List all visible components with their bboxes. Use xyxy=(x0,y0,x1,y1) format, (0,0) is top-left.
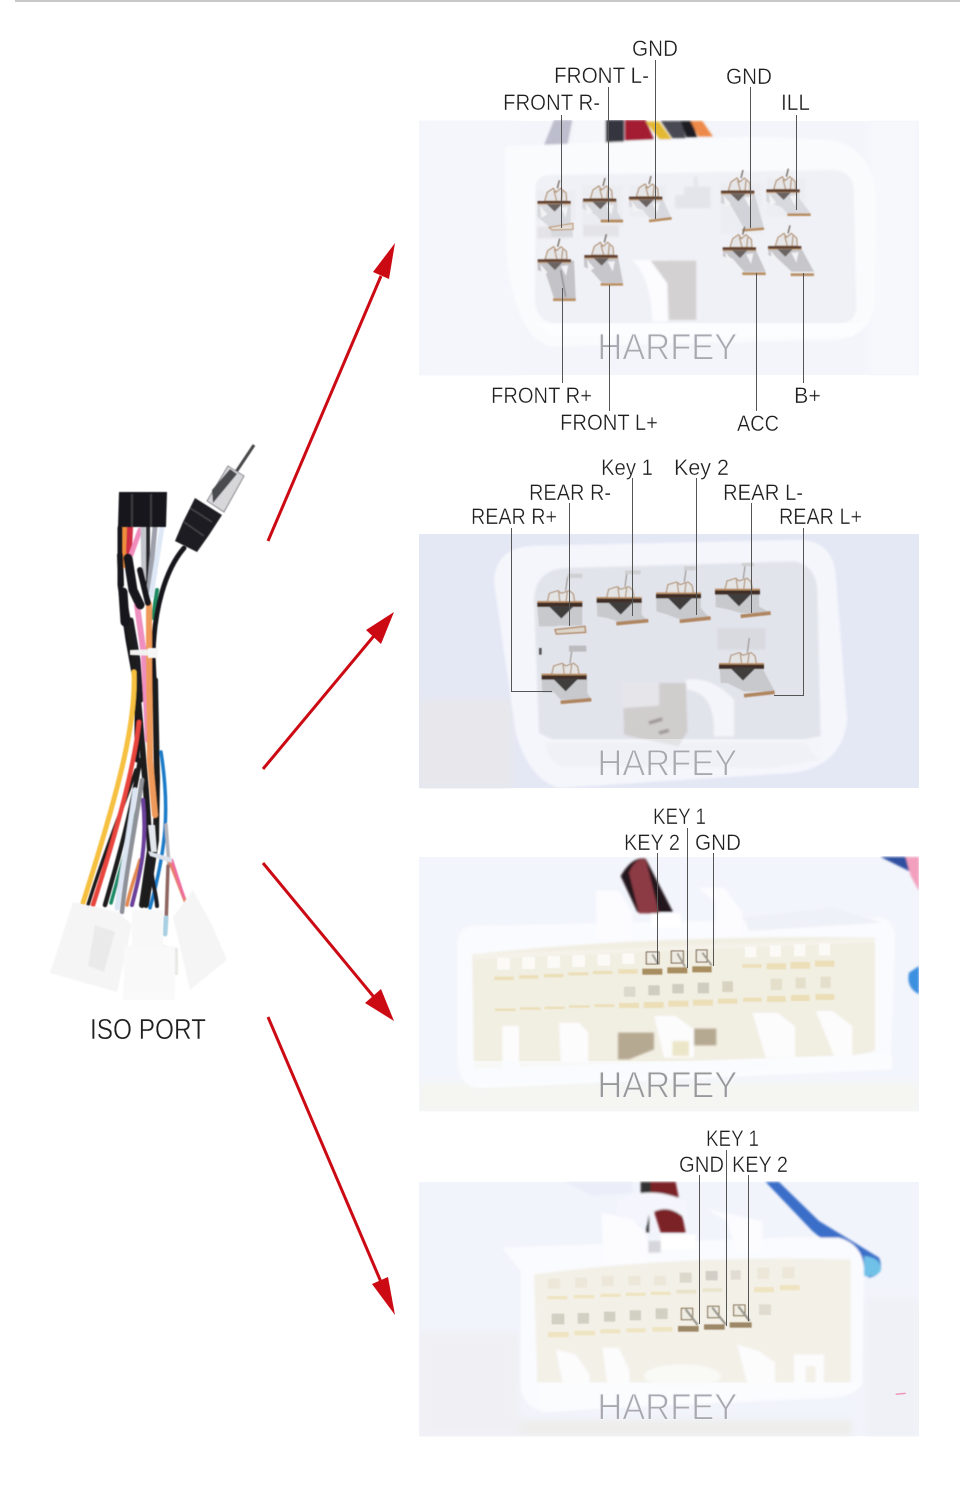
labels: panel 1: FRONT R- xyxy=(503,90,600,115)
upper wires xyxy=(121,527,127,565)
watermark: HARFEY xyxy=(597,1385,737,1427)
white connectors xyxy=(50,902,132,992)
labels: panel 4: KEY 2 xyxy=(732,1152,788,1177)
salmon wire xyxy=(170,862,186,903)
watermark band xyxy=(537,1383,864,1413)
heat-shrink tubes xyxy=(120,555,121,585)
arrow 3 xyxy=(263,863,394,1021)
labels: panel 3: KEY 1 xyxy=(653,804,706,829)
grey tube xyxy=(166,825,169,866)
contact pins xyxy=(537,202,573,237)
keying tabs xyxy=(618,1033,654,1059)
panel: connector photo 2 xyxy=(419,534,919,788)
green xyxy=(111,810,137,903)
labels: panel 2: Key 2 xyxy=(674,455,729,480)
top rule xyxy=(15,0,960,2)
black bundle xyxy=(120,528,137,760)
black right xyxy=(151,850,157,906)
labels: panel 3: GND xyxy=(695,830,741,855)
blue xyxy=(150,752,166,908)
cable ties xyxy=(130,649,157,656)
labels: panel 4: KEY 1 xyxy=(706,1126,759,1151)
labels: panel 2: REAR L+ xyxy=(779,504,862,529)
labels: panel 1: GND xyxy=(726,64,772,89)
labels: panel 1: FRONT L+ xyxy=(560,410,658,435)
socket windows xyxy=(548,1267,794,1289)
arrow 4 xyxy=(268,1017,395,1315)
pink speck xyxy=(896,1393,906,1394)
antenna cable xyxy=(153,548,184,700)
arrow 2 xyxy=(263,612,394,769)
wires at top xyxy=(544,120,572,145)
labels: panel 1: B+ xyxy=(794,383,821,408)
tan xyxy=(127,860,140,905)
labels: panel 1: ACC xyxy=(737,411,779,436)
labels: panel 3 xyxy=(624,804,741,855)
active contacts xyxy=(678,1305,752,1332)
purple xyxy=(132,800,144,905)
leader lines: panel 3 xyxy=(658,828,714,968)
arrow 1 xyxy=(268,243,395,541)
labels: panel 2: Key 1 xyxy=(601,455,653,480)
panel: connector photo 3 xyxy=(419,857,919,1111)
watermark: HARFEY xyxy=(597,326,737,368)
panel: connector photo 4 xyxy=(419,1182,919,1436)
labels: panel 3: KEY 2 xyxy=(624,830,680,855)
leader lines: panel 1 xyxy=(562,60,804,411)
watermark band xyxy=(544,739,822,768)
watermark band xyxy=(536,323,866,337)
watermark: HARFEY xyxy=(597,1064,737,1106)
labels: panel 4 xyxy=(679,1126,788,1177)
labels: panel 1: FRONT R+ xyxy=(491,383,592,408)
blue tip xyxy=(165,918,166,934)
white-blue xyxy=(117,790,135,908)
yellow xyxy=(83,672,134,903)
socket windows row 1 xyxy=(497,943,830,970)
pink and orange xyxy=(137,605,148,740)
grey xyxy=(122,780,142,912)
contact pins xyxy=(537,606,582,626)
leader lines: panel 4 xyxy=(700,1150,748,1326)
labels: panel 2: REAR L- xyxy=(723,480,803,505)
antenna plug xyxy=(214,445,254,505)
watermark: HARFEY xyxy=(597,742,737,784)
watermark band xyxy=(469,1061,769,1083)
labels: panel 1: GND xyxy=(632,36,678,61)
labels: panel 1: FRONT L- xyxy=(554,63,649,88)
caption: ISO PORT: ISO PORT xyxy=(90,1014,206,1046)
labels: panel 4: GND xyxy=(679,1152,724,1177)
wire harness photo xyxy=(50,445,254,1000)
red xyxy=(93,722,139,905)
black connector xyxy=(118,492,167,527)
active contacts xyxy=(642,950,712,975)
brown wire xyxy=(166,866,168,925)
labels: panel 2: REAR R- xyxy=(529,480,611,505)
labels: panel 1 xyxy=(491,36,821,436)
labels: panel 2: REAR R+ xyxy=(471,504,557,529)
black left xyxy=(105,760,140,905)
leader lines: panel 2 xyxy=(512,478,804,696)
keying tabs xyxy=(556,1349,590,1398)
labels: panel 1: ILL xyxy=(781,90,810,115)
panel: connector photo 1 xyxy=(419,120,919,375)
labels: panel 2 xyxy=(471,455,862,529)
